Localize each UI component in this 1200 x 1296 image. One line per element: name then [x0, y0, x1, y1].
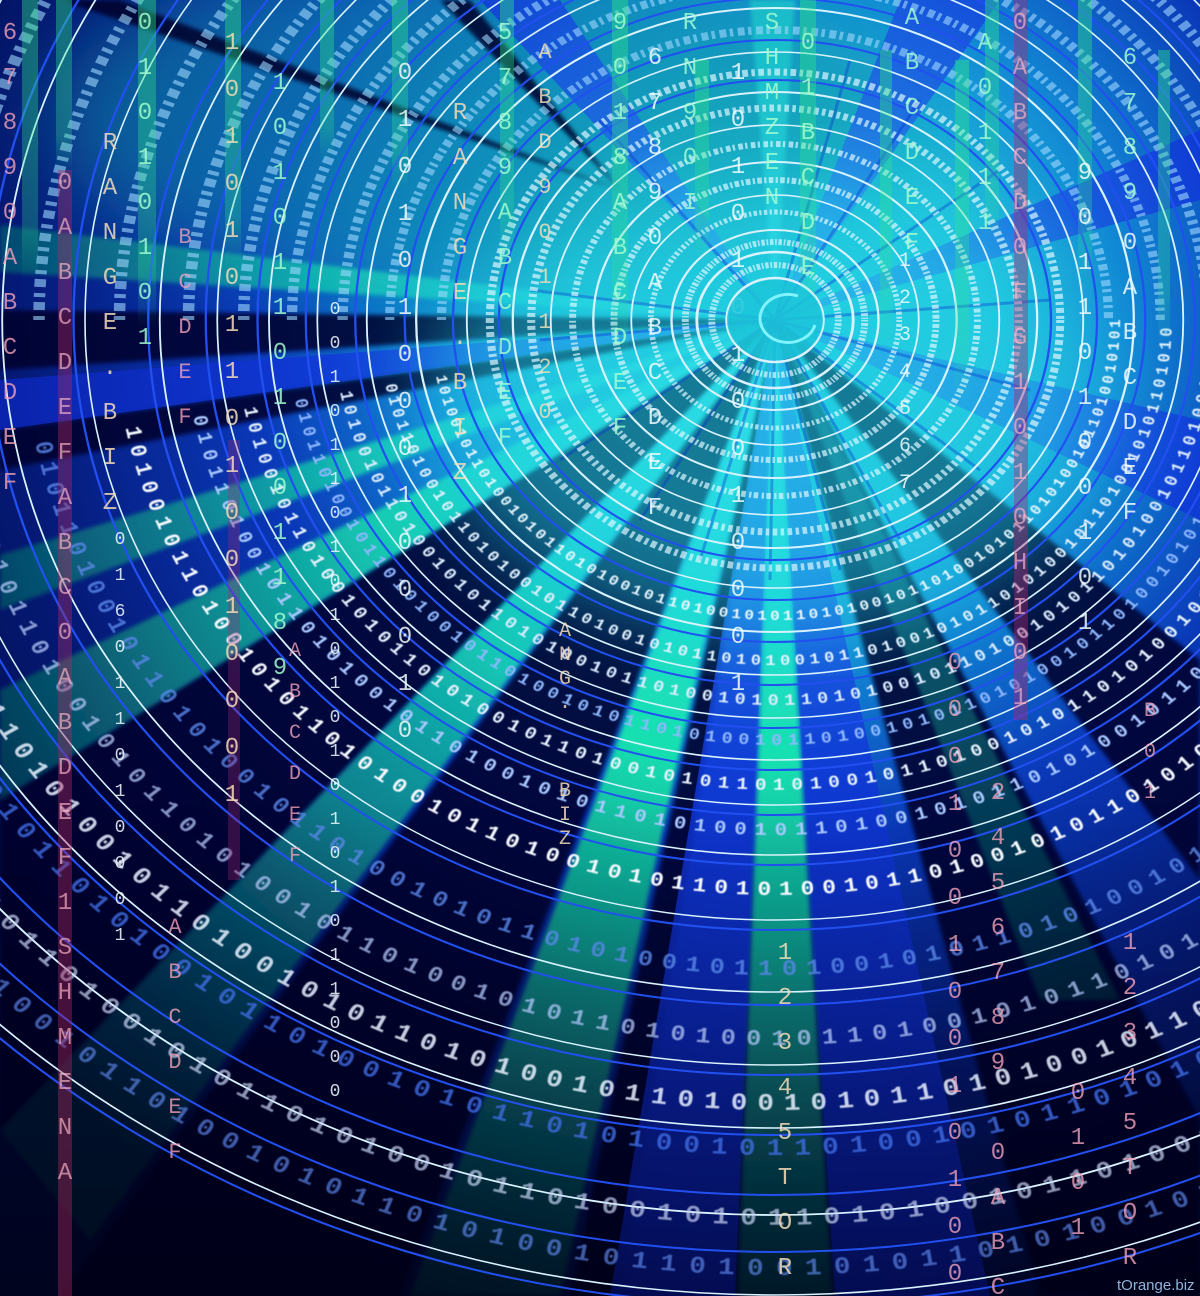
binary text rings — [0, 319, 1200, 1276]
column group: white characters: 001011010101010101011000 — [325, 300, 345, 1116]
column group: white characters: 010101000100010 — [392, 60, 418, 765]
column group: pink characters: 0ABCD0FG1010HI01 — [1006, 10, 1034, 730]
binary text rings: 10100101101001010110101001011010010101101010010110100101011010100101101001010110 — [340, 382, 1200, 706]
column group: green characters: 01010101 — [132, 10, 158, 370]
column group: cream characters: 10101011010010001 — [218, 30, 246, 829]
central spiral core — [727, 280, 823, 360]
column group: pink characters: 12345TOR — [1116, 930, 1144, 1290]
column group: pink characters: 0ABCDEFABC0ABDEF1SHMENA — [52, 170, 78, 1205]
binary text rings: 01011010010110101001011010010101101010010110100101011010100101101001010110101001 — [385, 328, 1172, 666]
radial streaks around the core — [530, 60, 1050, 580]
column group: green characters: 01BCDE — [794, 30, 822, 300]
column group: white characters: 0ABCDEF — [1116, 230, 1144, 545]
column group: green characters: 6789 — [1116, 45, 1144, 225]
column group: cream characters: RANGE.BIZ — [446, 100, 474, 505]
column group: green characters: 9018ABCDEF — [606, 10, 634, 460]
column group: green characters — [132, 5, 1144, 700]
column group: green characters: A0111 — [972, 30, 998, 255]
cyan glow below the core — [430, 170, 1110, 630]
column group: white characters: 10101010010001 — [724, 60, 752, 718]
column group: white characters: 016011010001 — [110, 530, 130, 962]
column group: white characters: 67890ABCDEF — [642, 45, 668, 540]
column group: white characters: 1234567 — [894, 250, 916, 509]
dashed binary arcs in the upper half — [0, 0, 1200, 320]
column group: green characters: 5789ABCDEF — [492, 20, 518, 470]
column group: pink characters: 0101 — [1064, 1080, 1092, 1260]
column group: pink characters: B01 — [1138, 700, 1162, 823]
column group: cream characters: BIZ — [554, 780, 576, 852]
column group: green characters: RN90I — [676, 10, 704, 235]
column group: cream characters: 12345TOR — [772, 940, 798, 1296]
column group: cream characters: ANG. — [554, 620, 576, 716]
column group: cream characters: RANGE.BIZ — [96, 130, 124, 535]
column group: white characters — [110, 45, 1144, 1116]
column group: pink characters: ABCDEF — [284, 640, 306, 886]
column group: white characters: 90110100101 — [1072, 160, 1098, 655]
green bands behind matrix columns — [22, 0, 1170, 400]
column group: cream characters: ABD901120 — [532, 40, 558, 445]
column group: green characters: 10101101001189 — [266, 70, 294, 700]
binary text rings: 10100101101001010110101001011010010101101010010110100101011010100101101001010110 — [436, 319, 1121, 621]
column group: pink characters: ABCDEF — [162, 915, 188, 1185]
column group: green characters: ABCDEF — [898, 5, 926, 275]
column group: green characters: SHMZEN — [758, 10, 786, 220]
teal wash at the top — [50, 0, 910, 290]
column group: pink characters: BCDEF — [172, 225, 198, 450]
column group: cream characters — [96, 30, 798, 1296]
dashed binary rings near the core — [490, 72, 1060, 568]
watermark: tOrange.biz — [1117, 1277, 1195, 1294]
